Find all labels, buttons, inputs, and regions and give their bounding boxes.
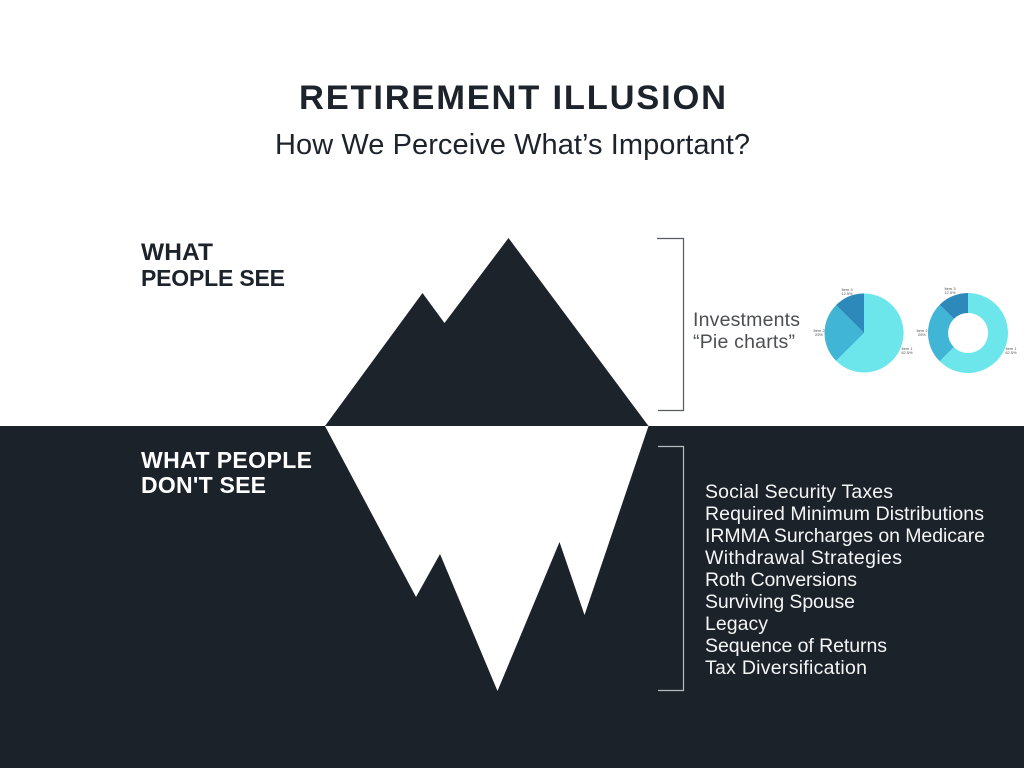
list: hidden retirement factors: Tax Diversification (705, 657, 867, 679)
list: hidden retirement factors: Withdrawal Strategies (705, 547, 902, 569)
pie chart: Item 1 (901, 346, 913, 351)
text: investments pie charts (693, 309, 800, 353)
bracket: visible (657, 238, 684, 410)
list: hidden retirement factors: Social Security Taxes (705, 481, 893, 503)
donut chart: Item 2 (916, 328, 928, 333)
list: hidden retirement factors: Roth Conversions (705, 569, 857, 591)
text: investments pie charts: Investments (693, 309, 800, 331)
list: hidden retirement factors: Required Minimum Distributions (705, 503, 984, 525)
title: RETIREMENT ILLUSION (299, 79, 726, 117)
iceberg below water (325, 426, 648, 691)
list: hidden retirement factors: Legacy (705, 613, 768, 635)
list: hidden retirement factors: Sequence of Returns (705, 635, 887, 657)
list: hidden retirement factors: IRMMA Surcharges on Medicare (705, 525, 985, 547)
donut chart: 12.5% (944, 290, 956, 295)
heading: what people see (141, 239, 285, 291)
pie chart: Item 3 (841, 287, 853, 292)
heading: what people don't see (141, 447, 312, 498)
pie chart: 12.5% (841, 291, 853, 296)
pie chart (813, 287, 913, 372)
heading: what people don't see: WHAT PEOPLE (141, 447, 312, 473)
list: hidden retirement factors (705, 481, 985, 679)
donut chart: Item 1 (1005, 346, 1017, 351)
iceberg above water (325, 238, 648, 426)
pie chart: 62.5% (901, 350, 913, 355)
donut chart: 25% (918, 332, 926, 337)
subtitle: How We Perceive What’s Important? (275, 129, 750, 161)
bracket: hidden (658, 446, 684, 690)
heading: what people see: WHAT (141, 239, 213, 266)
donut chart (916, 286, 1017, 373)
heading: what people don't see: DON'T SEE (141, 472, 266, 498)
heading: what people see: PEOPLE SEE (141, 265, 285, 291)
list: hidden retirement factors: Surviving Spouse (705, 591, 855, 613)
donut chart: Item 3 (944, 286, 956, 291)
text: investments pie charts: “Pie charts” (693, 331, 795, 353)
pie chart: 25% (815, 332, 823, 337)
donut chart: 62.5% (1005, 350, 1017, 355)
pie chart: Item 2 (813, 328, 825, 333)
